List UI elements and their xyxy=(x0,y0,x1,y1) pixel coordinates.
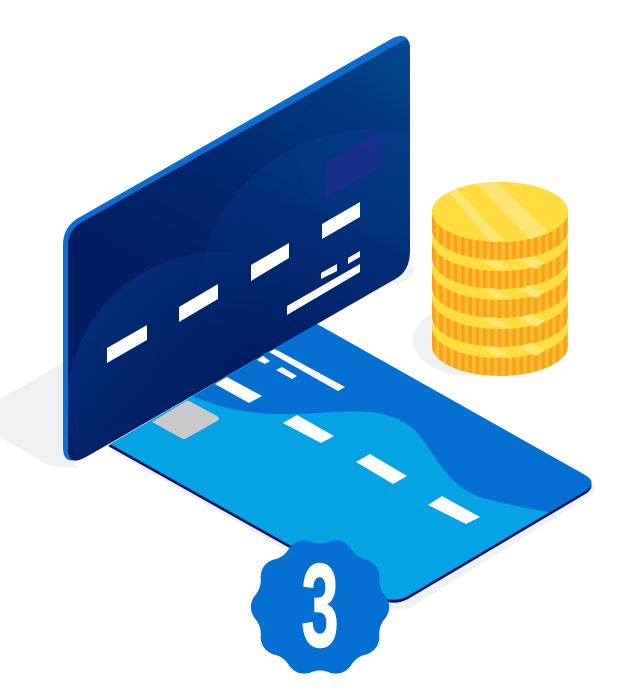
scalloped badge xyxy=(251,540,389,674)
darker wave band xyxy=(192,324,592,512)
number dashes xyxy=(107,202,360,363)
coin 1 top xyxy=(432,182,568,260)
coin 4 xyxy=(432,269,568,347)
badge number: 3 xyxy=(301,540,339,672)
chip xyxy=(152,401,219,439)
coin 5 xyxy=(432,298,568,376)
card face xyxy=(68,40,410,461)
card face xyxy=(110,324,592,600)
step badge: number 3 xyxy=(251,540,389,674)
face arcs xyxy=(68,135,410,460)
card text lines xyxy=(257,349,345,391)
card number dashes xyxy=(215,377,480,524)
upright credit card xyxy=(63,36,410,461)
card edge xyxy=(108,326,592,603)
coin 3 xyxy=(432,240,568,318)
card edge xyxy=(63,36,410,460)
coin 2 xyxy=(432,211,568,289)
hologram square xyxy=(326,131,379,198)
coin stack xyxy=(432,182,568,376)
coin highlights on stacked coins xyxy=(482,256,545,356)
text lines xyxy=(287,251,360,315)
ground shadows xyxy=(0,262,595,609)
flat credit card xyxy=(108,310,610,603)
